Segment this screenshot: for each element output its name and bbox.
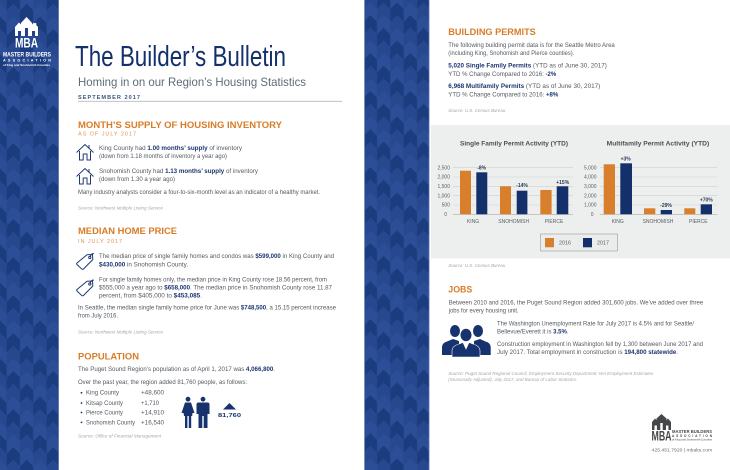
logo: Master Builders Association (white): MBA bbox=[15, 34, 38, 50]
title: The Builder’s Bulletin bbox=[75, 41, 286, 73]
text: single family only: percent, from $405,000 to $453,085. bbox=[99, 292, 202, 299]
heading: JOBS bbox=[448, 284, 472, 295]
icon: price tag bbox=[77, 280, 94, 296]
source: Source: Office of Financial Management bbox=[78, 434, 162, 439]
list: county growth: Snohomish County bbox=[86, 419, 136, 426]
stat: multifamily permits: YTD % Change Compared to 2016: +8% bbox=[448, 92, 559, 99]
icon: business people bbox=[442, 325, 491, 357]
King County text: King County had 1.00 months’ supply of inventory bbox=[99, 145, 243, 152]
list: county growth: +1,710 bbox=[141, 400, 159, 407]
list: county growth: +14,910 bbox=[141, 409, 164, 416]
y axis labels: 4,000 bbox=[584, 175, 597, 181]
icon: house bbox=[76, 168, 94, 184]
heading: POPULATION bbox=[78, 350, 139, 361]
chart: multifamily permit activity bbox=[584, 141, 717, 225]
bars: 2017 bbox=[476, 172, 568, 214]
text: intro bbox=[448, 42, 615, 57]
list: county growth: Kitsap County bbox=[86, 400, 124, 407]
legend bbox=[540, 234, 618, 251]
change labels bbox=[621, 157, 713, 209]
panel: jobs bbox=[442, 284, 704, 382]
King County text bbox=[99, 145, 243, 160]
category labels bbox=[467, 219, 564, 225]
logo: Master Builders Association (white): MASTER BUILDERS bbox=[3, 52, 51, 58]
list: county growth: +16,540 bbox=[141, 419, 164, 426]
chart: single family permit activity bbox=[437, 141, 573, 225]
y axis labels bbox=[584, 165, 597, 218]
Snohomish County text: Snohomish County had 1.13 months’ supply of inventory bbox=[99, 168, 259, 175]
value: 81,760: 81,760 bbox=[218, 413, 241, 419]
y axis labels: 1,500 bbox=[437, 184, 450, 190]
source: Source: Puget Sound Regional Council, Employment Security Department: WA Employment Estimates bbox=[448, 371, 654, 376]
y axis labels: 1,000 bbox=[437, 193, 450, 199]
change labels bbox=[477, 166, 570, 189]
source: Source: Northwest Multiple Listing Service bbox=[78, 206, 164, 211]
text: unemployment: The Washington Unemployment Rate for July 2017 is 4.5% and for Seattle/ bbox=[497, 320, 694, 327]
source bbox=[448, 371, 654, 382]
source: Source: Northwest Multiple Listing Service bbox=[78, 330, 164, 335]
text: population total: The Puget Sound Region’s population as of April 1, 2017 was 4,066,800. bbox=[78, 366, 275, 373]
logo: Master Builders Association (dark): of King and Snohomish Counties bbox=[672, 438, 713, 441]
stat: single family permits: YTD % Change Compared to 2016: -2% bbox=[448, 71, 557, 78]
Snohomish County text: (down from 1.30 a year ago) bbox=[99, 176, 175, 183]
Snohomish County text bbox=[99, 168, 259, 183]
text: single family only: For single family homes only, the median price in King County rose 18.56 percent, from bbox=[99, 277, 327, 284]
text: intro bbox=[448, 300, 704, 315]
source: (Seasonally Adjusted), July 2017, and Bureau of Labor Statistics. bbox=[448, 377, 577, 382]
text: construction employment bbox=[497, 341, 703, 356]
y axis labels: 0 bbox=[591, 212, 594, 218]
text: growth intro: Over the past year, the region added 81,760 people, as follows: bbox=[78, 379, 247, 386]
bars: 2016 bbox=[460, 171, 552, 214]
y axis labels bbox=[437, 165, 450, 218]
bars: 2016 bbox=[604, 164, 695, 214]
text: intro: (including King, Snohomish and Pierce counties). bbox=[448, 50, 575, 57]
list: county growth: Pierce County bbox=[86, 409, 124, 416]
list: county growth: +48,600 bbox=[141, 390, 164, 397]
text: unemployment bbox=[497, 320, 694, 335]
source: Source: U.S. Census Bureau bbox=[448, 263, 506, 268]
heading: BUILDING PERMITS bbox=[448, 26, 536, 37]
bars: 2017 bbox=[620, 163, 712, 214]
change labels: +70% bbox=[700, 198, 713, 204]
category labels: PIERCE bbox=[689, 219, 708, 225]
category labels: KING bbox=[612, 219, 624, 225]
source: Source: U.S. Census Bureau bbox=[448, 108, 506, 113]
logo: Master Builders Association (dark): ASSOCIATION bbox=[672, 434, 713, 438]
y axis labels: 5,000 bbox=[584, 165, 597, 171]
list: county growth bbox=[81, 390, 164, 426]
subheading: AS OF JULY 2017 bbox=[78, 132, 136, 138]
legend: 2017 bbox=[597, 241, 609, 247]
stat: single family permits bbox=[448, 63, 607, 78]
text: Seattle: from July 2016. bbox=[78, 313, 118, 320]
stat: single family permits: 5,020 Single Family Permits (YTD as of June 30, 2017) bbox=[448, 63, 607, 70]
text: Seattle: In Seattle, the median single family home price for June was $748,500, a 15.15 percent increase bbox=[78, 305, 336, 312]
text: single family only: $555,000 a year ago to $658,000. The median price in Snohomish County rose 11.87 bbox=[99, 285, 332, 292]
panel: median home price bbox=[77, 225, 336, 335]
text: intro: Between 2010 and 2016, the Puget Sound Region added 301,600 jobs. We’ve added over three bbox=[449, 300, 704, 307]
text: unemployment: Bellevue/Everett it is 3.5%. bbox=[497, 328, 569, 335]
panel: building permits bbox=[448, 26, 615, 113]
contact line: 425.451.7920 | mbaks.com bbox=[652, 448, 712, 453]
heading: MEDIAN HOME PRICE bbox=[78, 225, 177, 236]
logo: Master Builders Association (dark) bbox=[652, 414, 713, 443]
logo: Master Builders Association (dark): MBA bbox=[652, 428, 672, 443]
text: intro: jobs for every housing unit. bbox=[448, 308, 519, 315]
change labels: -14% bbox=[516, 183, 528, 189]
icon: up triangle bbox=[223, 403, 236, 410]
change labels: -8% bbox=[477, 166, 487, 172]
y axis labels: 3,000 bbox=[584, 184, 597, 190]
legend: 2016 bbox=[559, 241, 571, 247]
date: SEPTEMBER 2017 bbox=[78, 95, 140, 101]
panel: population bbox=[78, 350, 275, 439]
logo: Master Builders Association (white) bbox=[3, 17, 51, 67]
background band: left chevron strip bbox=[0, 0, 59, 470]
logo: Master Builders Association (dark): MASTER BUILDERS bbox=[672, 429, 713, 435]
y axis labels: 2,000 bbox=[584, 193, 597, 199]
text: healthy market note: Many industry analysts consider a four-to-six-month level as an indicator of a healthy market. bbox=[78, 189, 320, 196]
panel: housing inventory bbox=[76, 119, 320, 211]
heading: MONTH’S SUPPLY OF HOUSING INVENTORY bbox=[78, 119, 283, 130]
y axis labels: 1,000 bbox=[584, 203, 597, 209]
category labels: PIERCE bbox=[545, 219, 564, 225]
text: single family and condos: $430,000 in Snohomish County. bbox=[99, 262, 188, 269]
logo: Master Builders Association (white): of King and Snohomish Counties bbox=[3, 63, 50, 67]
icon: woman and man bbox=[182, 397, 210, 428]
y axis labels: 2,500 bbox=[437, 165, 450, 171]
text: single family only bbox=[99, 277, 332, 299]
King County text: (down from 1.18 months of inventory a year ago) bbox=[99, 153, 227, 160]
icon: price tag bbox=[77, 254, 94, 269]
text: intro: The following building permit data is for the Seattle Metro Area bbox=[448, 42, 615, 49]
change labels: +3% bbox=[621, 157, 631, 163]
category labels: KING bbox=[467, 219, 479, 225]
text: construction employment: Construction employment in Washington fell by 1,300 between June 2017 and bbox=[497, 341, 703, 348]
icon: house bbox=[76, 144, 94, 160]
change labels: +15% bbox=[556, 180, 570, 186]
chart title: Single Family Permit Activity (YTD) bbox=[460, 141, 568, 148]
subtitle: Homing in on our Region’s Housing Statistics bbox=[78, 75, 306, 89]
text: construction employment: July 2017. Total employment in construction is 194,800 statewide. bbox=[497, 349, 678, 356]
category labels bbox=[612, 219, 708, 225]
subheading: IN JULY 2017 bbox=[78, 239, 122, 245]
chart title: Multifamily Permit Activity (YTD) bbox=[607, 141, 709, 148]
category labels: SNOHOMISH bbox=[643, 219, 674, 225]
y axis labels: 0 bbox=[444, 212, 447, 218]
y axis labels: 2,000 bbox=[437, 175, 450, 181]
y axis labels: 500 bbox=[442, 203, 450, 209]
list: county growth: King County bbox=[86, 390, 120, 397]
category labels: SNOHOMISH bbox=[498, 219, 530, 225]
background band: center chevron strip bbox=[365, 0, 430, 470]
change labels: -29% bbox=[660, 203, 672, 209]
panel: chart background bbox=[431, 125, 730, 258]
logo: Master Builders Association (white): ASSOCIATION bbox=[3, 58, 51, 62]
text: Seattle bbox=[78, 305, 336, 320]
stat: multifamily permits bbox=[448, 83, 600, 99]
text: single family and condos: The median price of single family homes and condos was $599,000 in King County and bbox=[99, 253, 334, 260]
text: single family and condos bbox=[99, 253, 334, 269]
stat: multifamily permits: 6,968 Multifamily Permits (YTD as of June 30, 2017) bbox=[448, 83, 600, 90]
